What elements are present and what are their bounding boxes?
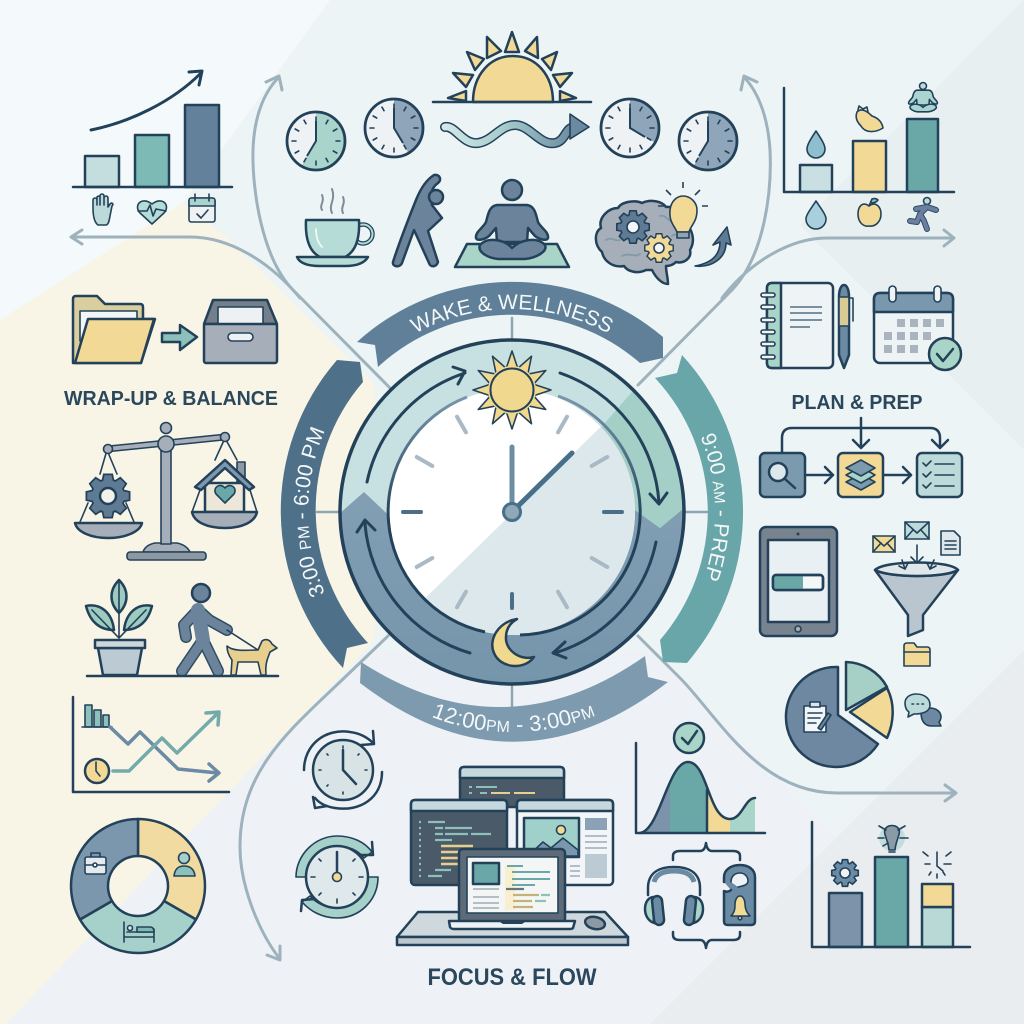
icon: apple: [858, 199, 881, 226]
icon: door hanger: [724, 865, 755, 925]
icon: notebook: [761, 283, 833, 368]
icon: checklist box: [917, 453, 962, 497]
icon: small meditation: [909, 82, 937, 112]
heading: plan and prep: PLAN & PREP: [792, 392, 922, 414]
declining line: [110, 727, 219, 781]
icon: headphones: [645, 867, 703, 925]
icon: bulb with rays: [878, 825, 908, 852]
icon: sun: [473, 351, 551, 429]
panel: plan and prep: [760, 283, 962, 767]
icon: funnel with inputs: [873, 522, 960, 636]
icon: gear: [832, 860, 858, 886]
icon: tablet with progress bar: [760, 527, 837, 636]
clock ticks: [403, 417, 622, 608]
icon: brain with gears and bulb: [596, 182, 731, 284]
icon: layers box: [838, 453, 883, 497]
panel: wrap-up and balance: [64, 296, 278, 676]
laptop: [449, 849, 575, 929]
banner: 9 am prep: 9:00 AM - PREP: [702, 434, 729, 581]
icon: person walking dog: [182, 584, 277, 675]
icon: hand: [93, 194, 113, 225]
icon: clock seven slate: [679, 112, 737, 170]
pie chart: [786, 662, 893, 767]
icon: stretching figure: [393, 175, 443, 266]
icon: balance scale: [75, 422, 257, 560]
banner: 9 am prep: [655, 355, 743, 663]
icon: archive box: [204, 300, 277, 363]
banner: 12 to 3 pm: [360, 656, 668, 742]
banner: 3 to 6 pm: 3:00 PM - 6:00 PM: [294, 426, 324, 597]
icon: coffee cup: [297, 189, 372, 266]
bar chart: bottom right: [812, 822, 970, 947]
icon: transfer arrow: [162, 325, 197, 350]
icon: pen: [839, 285, 853, 368]
back code window: [460, 767, 564, 807]
icon: calendar check: [189, 194, 215, 222]
icon: gear on pan: [86, 474, 130, 518]
icon: water drop top: [807, 131, 825, 158]
panel: focus and flow: [296, 723, 765, 991]
heading: wrap-up and balance: WRAP-UP & BALANCE: [64, 388, 278, 410]
ground line: [87, 675, 278, 677]
bottom brace: [673, 932, 740, 948]
trend arrow: [91, 71, 202, 130]
donut chart: [71, 819, 205, 953]
cycle arrows: [357, 367, 667, 658]
icon: person: [174, 852, 195, 876]
icon: water drop bottom: [806, 201, 826, 229]
desk: [397, 912, 628, 945]
right image window: [517, 800, 613, 885]
banner: 3 to 6 pm: [280, 360, 368, 668]
banner: wake and wellness: [357, 282, 663, 367]
icon: fruit: [856, 106, 883, 132]
rising line: [113, 712, 219, 771]
clock ring: [338, 338, 686, 686]
icon: clock rays: [923, 852, 951, 878]
icon: potted plant: [86, 580, 152, 675]
bell curve chart: [636, 723, 765, 840]
icon: check badge: [674, 723, 704, 753]
clock face: [386, 393, 642, 636]
flow diagram: [760, 418, 962, 497]
icon: clipboard: [804, 702, 831, 732]
icon: speech bubbles: [905, 694, 941, 726]
icon: bed: [124, 922, 154, 942]
icon: meditation: [455, 180, 569, 267]
banner: wake and wellness: WAKE & WELLNESS: [409, 294, 613, 332]
icon: magnifier box: [760, 453, 805, 497]
bar chart: top left: [73, 71, 232, 225]
icon: small folder: [904, 643, 930, 666]
icon: calendar: [874, 286, 961, 370]
icon: clock four slate right: [601, 99, 659, 157]
clock hands: [504, 447, 572, 520]
icon: yellow clock: [85, 759, 109, 783]
top brace: [673, 843, 740, 860]
panel: wake and wellness icons: [287, 32, 737, 284]
icon: moon: [492, 619, 534, 666]
icon: rising sun: [433, 32, 591, 102]
icon: focus timer: [296, 836, 378, 918]
central clock: [338, 338, 686, 686]
icon: wave arrow: [445, 114, 589, 143]
heading: focus and flow: FOCUS & FLOW: [428, 964, 597, 991]
icon: clock seven teal: [287, 112, 345, 170]
icon: folder: [73, 296, 155, 363]
icon: clock five slate left: [365, 99, 423, 157]
banner: 12 to 3 pm: 12:00PM - 3:00PM: [432, 704, 595, 732]
icon: briefcase: [85, 853, 106, 874]
line chart: left: [73, 697, 229, 792]
icon: heart pulse: [138, 201, 166, 224]
connector arrows: [71, 76, 956, 960]
mini bars: [82, 705, 112, 727]
bar chart: top right: [784, 82, 954, 229]
icon: runner: [910, 198, 936, 229]
icon: house with heart: [195, 460, 254, 512]
left code window: [411, 800, 507, 885]
icon: clock with cycle arrows: [304, 731, 382, 809]
